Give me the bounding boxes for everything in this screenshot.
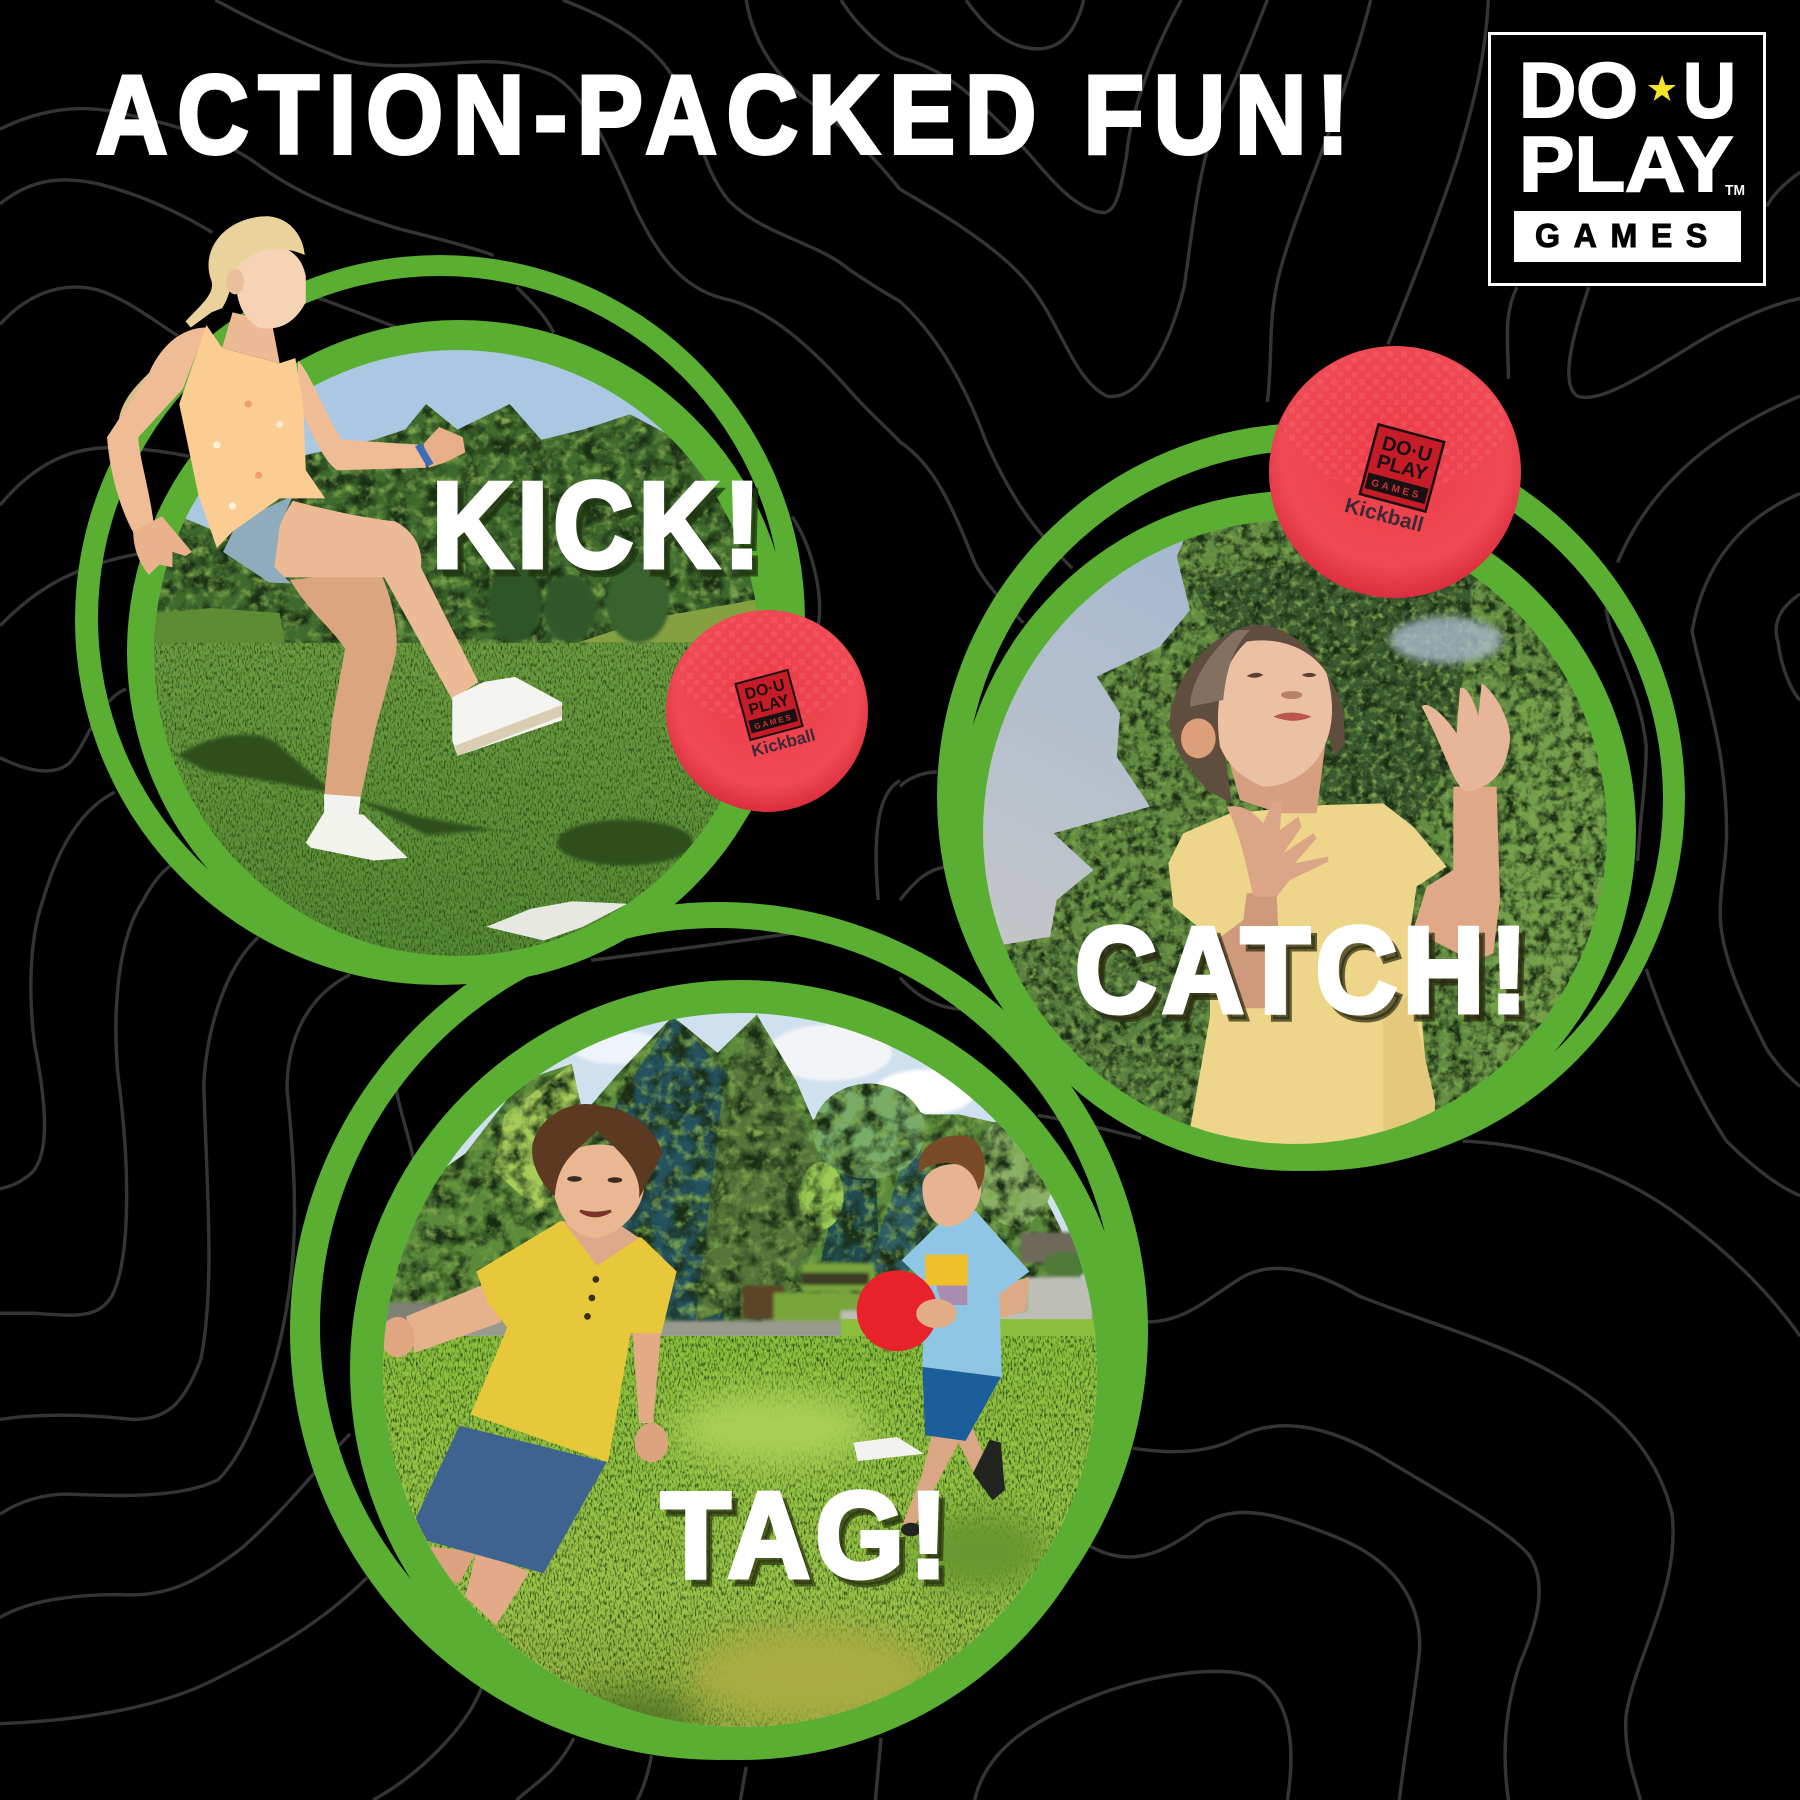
socks and shoes [324,794,361,822]
heading: kick: KICK! [432,457,766,593]
panel: catch [937,346,1685,1200]
ball: kickball above boy: PLAY [1374,451,1430,485]
logo: Do U Play Games: PLAY [1519,120,1733,208]
logo: Do U Play Games: DO [1519,46,1638,134]
ball: kickball above boy: Kickball [1342,494,1426,537]
ball: kickball above boy [1269,346,1521,598]
heading: tag: TAG! [661,1467,953,1603]
panel: kick [75,216,868,985]
front arm [298,361,426,470]
logo: Do U Play Games: GAMES [1535,217,1721,254]
panel: tag [290,902,1148,1762]
ball: kickball in flight: PLAY [747,692,792,719]
logo: Do U Play Games: U [1683,46,1736,134]
ball: kickball above boy: GAMES [1370,478,1423,502]
ball: kickball in flight [666,610,868,812]
logo: Do U Play Games: TM [1725,182,1745,199]
green double ring [290,902,1148,1760]
icon: yellow star [1648,75,1676,101]
label shadow: kick: KICK! [438,464,772,600]
raised leg [274,501,478,700]
label shadow: tag: TAG! [667,1474,959,1610]
back arm [107,328,206,537]
boy in yellow shirt [381,1104,677,1625]
standing leg [290,570,397,797]
shorts and tank top [223,496,293,584]
ball: kickball above boy: DO·U [1379,432,1434,467]
green double ring [75,255,805,985]
boy in blue shirt with red ball [857,1135,1029,1536]
ball: kickball in flight: Kickball [749,725,817,761]
girl kicking [107,216,562,860]
photo: boy catching ball [983,520,1607,1144]
heading: catch: CATCH! [1075,902,1533,1038]
back braid [124,363,167,422]
boy [1168,625,1510,1167]
label shadow: catch: CATCH! [1081,909,1539,1045]
photo: field and trees [154,350,757,956]
photo: kids running and tagging [383,1013,1097,1727]
ball: kickball in flight: GAMES [753,712,794,731]
head and hair [222,312,280,363]
white base [486,901,627,941]
title: ACTION-PACKED FUN! [96,53,1359,177]
ball: kickball in flight: DO·U [743,677,787,704]
green double ring [937,423,1685,1171]
white base [853,1437,924,1461]
logo: Do U Play Games [1490,34,1764,284]
